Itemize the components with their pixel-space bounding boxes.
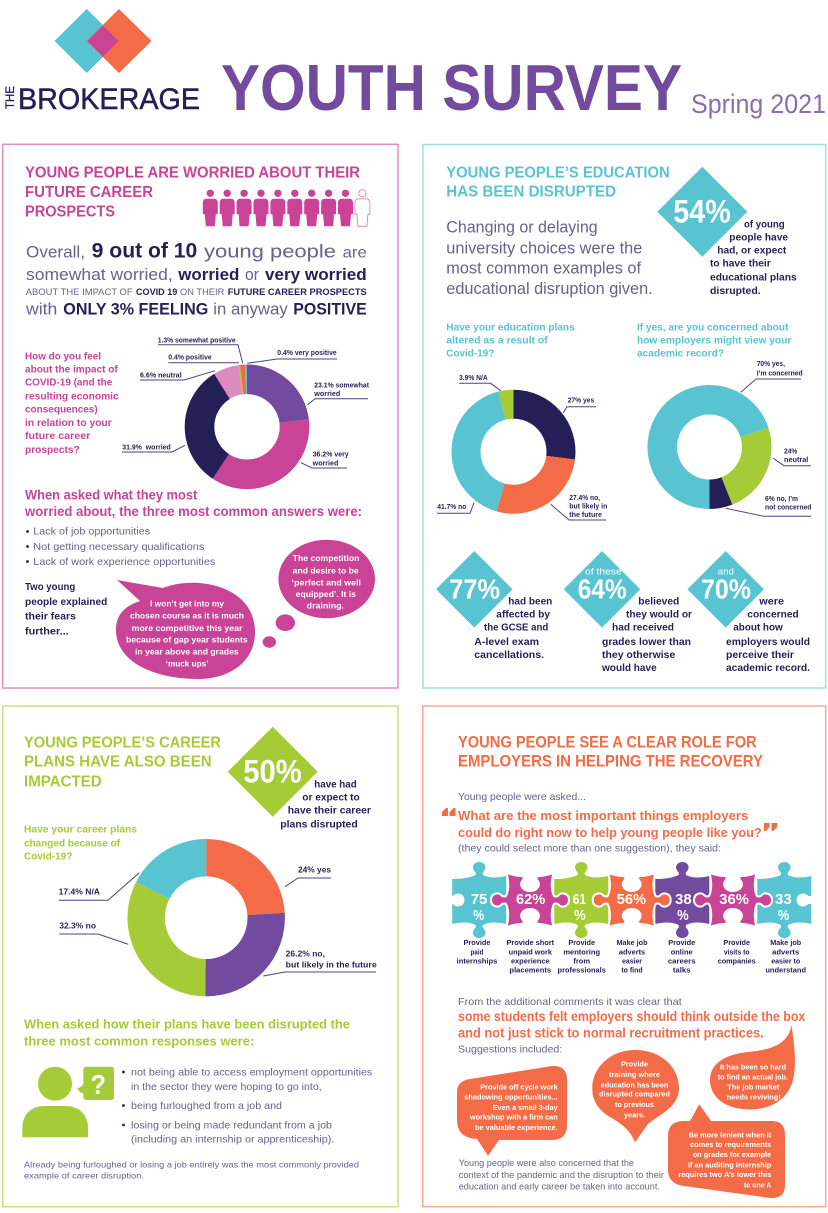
heading: IMPACTED xyxy=(24,773,102,790)
chart labels: education plans: 41.7% no xyxy=(437,504,466,511)
speech bubble: lenient on grades: to one A xyxy=(744,1180,772,1189)
puzzle labels: understand xyxy=(765,965,806,974)
footnote: Already being furloughed or losing a job entirely was the most commonly provided xyxy=(24,1160,359,1170)
stat: 70%: employers would xyxy=(726,636,810,648)
speech bubble: work shadowing: shadowing opportunities... xyxy=(464,1093,558,1102)
stat: 77%: had been xyxy=(508,595,552,607)
speech bubble: work shadowing: Even a small 3-day xyxy=(493,1103,558,1112)
headline statement: worried xyxy=(177,266,239,284)
stat: 64%: of these xyxy=(585,567,622,577)
thought bubble: perfect and well equipped: ‘perfect and well xyxy=(292,577,361,587)
puzzle labels xyxy=(457,938,806,974)
chart labels: career plans: but likely in the future xyxy=(286,959,377,969)
puzzle labels: Provide short xyxy=(506,938,555,947)
stat text: 50%: have their career xyxy=(288,805,371,817)
speech bubble: job market xyxy=(710,1025,795,1110)
chart labels: career plans: 32.3% no xyxy=(59,921,96,931)
chart labels: worried xyxy=(312,461,338,468)
stat: 64%: grades lower than xyxy=(602,636,691,648)
bullet list: worries: Lack of job opportunities xyxy=(33,526,150,538)
chart labels: 23.1% somewhat xyxy=(314,383,370,390)
puzzle graphic: employer suggestions: 38 xyxy=(675,891,692,908)
headline statement: COVID 19 xyxy=(136,287,177,298)
panel: career plans xyxy=(3,706,398,1207)
chart labels: academic record: 24% xyxy=(784,448,798,455)
body text: most common examples of xyxy=(446,260,641,278)
speech bubble: course competition: because of gap year students xyxy=(126,635,248,645)
headline statement: FUTURE CAREER PROSPECTS xyxy=(228,287,367,298)
puzzle labels: online xyxy=(671,947,693,956)
chart labels: worried xyxy=(313,391,340,398)
speech bubble: lenient on grades: if an auditing internship xyxy=(688,1160,772,1169)
question: education plans altered: altered as a result of xyxy=(446,334,548,346)
chart labels: academic record: not concerned xyxy=(765,504,811,511)
speech bubble: lenient on grades: requires two A’s lower this xyxy=(678,1170,771,1179)
icon: nine of ten people xyxy=(203,190,370,226)
chart labels: career plans: 17.4% N/A xyxy=(59,886,100,896)
headline statement: with xyxy=(25,299,57,318)
stat: 64%: 64% xyxy=(578,573,627,604)
logo: The Brokerage: BROKERAGE xyxy=(18,83,200,116)
chart labels: 31.9% worried xyxy=(122,444,171,451)
chart labels: career plans: 26.2% no, xyxy=(286,948,325,958)
thought bubble: perfect and well equipped: draining. xyxy=(307,601,344,611)
question: academic record xyxy=(637,321,791,360)
heading xyxy=(458,734,763,770)
heading: YOUNG PEOPLE ARE WORRIED ABOUT THEIR xyxy=(25,165,360,182)
stat: 70%: perceive their xyxy=(726,649,794,661)
stat text: 54%: to have their xyxy=(710,258,771,270)
stat text: 50%: or expect to xyxy=(302,792,360,804)
heading: PROSPECTS xyxy=(25,204,115,221)
puzzle graphic: employer suggestions: 36% xyxy=(719,891,749,908)
panel: employers role xyxy=(423,706,826,1207)
bullet list: disruptions: being furloughed from a job and xyxy=(131,1100,282,1112)
heading: HAS BEEN DISRUPTED xyxy=(446,184,616,201)
heading: FUTURE CAREER xyxy=(25,184,153,201)
speech bubble: course competition: ‘muck ups’ xyxy=(166,659,208,669)
question text xyxy=(25,350,119,456)
stat: 77%: cancellations. xyxy=(474,649,544,661)
chart labels: academic record: 6% no, I’m xyxy=(765,496,798,503)
stat: 77%: 77% xyxy=(449,573,500,604)
speech bubble: work shadowing xyxy=(457,1066,567,1156)
stat text: 54%: people have xyxy=(729,232,788,244)
question: career plans changed: Covid-19? xyxy=(24,851,72,863)
stat diamond: 54% xyxy=(657,167,747,257)
chart labels xyxy=(122,338,370,468)
chart labels: education plans: 27% yes xyxy=(568,398,594,405)
stat: 77%: affected by xyxy=(496,609,550,621)
stat: 64% xyxy=(564,551,692,674)
chart labels: education plans: the future xyxy=(569,512,602,519)
quote question xyxy=(458,808,762,840)
footnote xyxy=(24,1160,359,1181)
puzzle labels: adverts xyxy=(772,947,799,956)
puzzle graphic: employer suggestions: 56% xyxy=(617,891,646,908)
heading xyxy=(25,165,360,221)
additional comments text: and not just stick to normal recruitment practices. xyxy=(458,1026,764,1041)
subheading: disruption responses: When asked how their plans have been disrupted the xyxy=(24,1016,350,1031)
stat: 64%: had received xyxy=(612,622,674,634)
puzzle labels: internships xyxy=(457,957,497,966)
chart labels: career plans: 24% yes xyxy=(298,865,331,875)
puzzle labels: talks xyxy=(673,965,691,974)
icon: person with question xyxy=(22,1067,114,1137)
heading xyxy=(446,165,670,201)
heading: YOUNG PEOPLE SEE A CLEAR ROLE FOR xyxy=(458,734,757,752)
question text: future career xyxy=(25,430,90,442)
stat: 70%: were xyxy=(758,595,784,607)
additional comments text: From the additional comments it was clear that xyxy=(458,996,682,1008)
stat text: 54%: of young xyxy=(744,219,785,231)
stat: 70%: about how xyxy=(733,622,783,634)
question: career plans changed: Have your career plans xyxy=(24,823,137,835)
puzzle graphic: employer suggestions: % xyxy=(574,907,586,924)
speech bubble: training: disrupted compared xyxy=(599,1090,670,1099)
stat: 70%: concerned xyxy=(747,609,799,621)
stat text: 50%: plans disrupted xyxy=(280,819,358,831)
question: education plans altered xyxy=(446,321,575,360)
speech bubble: lenient on grades xyxy=(668,1104,785,1198)
stat text: 50%: have had xyxy=(314,779,357,791)
headline statement: young people xyxy=(204,242,336,262)
bullet list: disruptions: losing or being made redundant from a job xyxy=(131,1120,332,1132)
headline statement: are xyxy=(343,245,367,262)
puzzle labels: easier xyxy=(622,957,642,966)
stat text: 54%: disrupted. xyxy=(710,285,761,297)
stat: 77%: A-level exam xyxy=(474,636,539,648)
heading: EMPLOYERS IN HELPING THE RECOVERY xyxy=(458,752,763,770)
headline statement: very worried xyxy=(265,266,367,284)
chart labels: education plans: 27.4% no, xyxy=(569,495,600,502)
headline statement xyxy=(25,240,367,318)
question: education plans altered: Covid-19? xyxy=(446,348,494,360)
heading: YOUNG PEOPLE’S CAREER xyxy=(24,735,221,752)
puzzle labels: professionals xyxy=(558,965,606,974)
speech bubble: work shadowing: be valuable experience. xyxy=(475,1123,558,1132)
speech bubble: lenient on grades: on grades for example xyxy=(693,1150,771,1159)
puzzle labels: paid xyxy=(471,947,484,956)
icon: person with question: ? xyxy=(90,1069,106,1100)
thought bubble: perfect and well equipped: The competition xyxy=(293,553,359,563)
stat: 70%: academic record. xyxy=(726,662,810,674)
text: two young people: people explained xyxy=(25,596,107,608)
puzzle labels: experience xyxy=(511,957,550,966)
body text: university choices were the xyxy=(446,239,642,257)
quote question: could do right now to help young people like you? xyxy=(458,825,762,840)
additional comments text xyxy=(458,996,806,1056)
puzzle graphic: employer suggestions: % xyxy=(473,907,484,924)
stat: 77%: the GCSE and xyxy=(484,622,548,634)
puzzle graphic: employer suggestions: % xyxy=(677,907,689,924)
intro text: Young people were asked... xyxy=(458,791,586,803)
donut chart: feelings about COVID impact xyxy=(185,364,309,489)
question: career plans changed xyxy=(24,823,137,863)
speech bubble: job market: to find an actual job. xyxy=(718,1073,788,1082)
stat diamond: 54%: 54% xyxy=(673,193,731,229)
puzzle labels: unpaid work xyxy=(509,947,553,956)
bullet list: disruptions: not being able to access employment opportunities xyxy=(131,1066,372,1078)
donut chart: career plans xyxy=(128,839,285,996)
closing text xyxy=(459,1158,664,1193)
additional comments text: some students felt employers should think outside the box xyxy=(458,1009,806,1024)
puzzle graphic: employer suggestions: 61 xyxy=(573,891,586,908)
additional comments text: Suggestions included: xyxy=(458,1044,562,1056)
subheading: disruption responses xyxy=(24,1016,350,1048)
text: two young people: further... xyxy=(25,626,69,638)
question: academic record: how employers might view your xyxy=(637,334,791,346)
stat text: 54%: had, or expect xyxy=(717,245,787,257)
bullet list: worries xyxy=(26,526,215,568)
speech bubble: course competition: in year above and grades xyxy=(135,647,239,657)
question text: consequences) xyxy=(25,404,98,416)
headline statement: somewhat worried, xyxy=(26,266,173,284)
speech bubble: training: Provide xyxy=(621,1060,648,1069)
donut chart: academic record concern xyxy=(648,385,772,509)
question text: resulting economic xyxy=(25,390,119,402)
puzzle labels: to find xyxy=(621,965,643,974)
thought bubble: perfect and well equipped xyxy=(263,540,375,648)
chart labels: education plans xyxy=(437,375,607,520)
puzzle graphic: employer suggestions: 75 xyxy=(471,891,487,908)
note text: (they could select more than one suggestion), they said: xyxy=(458,842,721,854)
footnote: example of career disruption. xyxy=(24,1171,144,1181)
chart labels: 0.4% positive xyxy=(168,355,212,362)
puzzle labels: Provide xyxy=(668,938,695,947)
closing text: education and early career be taken into account. xyxy=(459,1182,660,1193)
headline statement: ONLY 3% FEELING xyxy=(63,299,208,318)
stat: 64%: they would or xyxy=(626,609,692,621)
speech bubble: training: education has been xyxy=(601,1080,669,1089)
puzzle labels: Provide xyxy=(568,938,595,947)
chart labels: 6.6% neutral xyxy=(140,372,182,379)
puzzle labels: from xyxy=(573,957,590,966)
quote question: What are the most important things employers xyxy=(458,808,748,823)
question text: prospects? xyxy=(25,444,80,456)
puzzle labels: easier to xyxy=(771,957,801,966)
question text: COVID-19 (and the xyxy=(25,377,112,389)
body text xyxy=(446,219,653,298)
bullet list: worries: Not getting necessary qualifications xyxy=(33,541,204,553)
bullet list: disruptions: (including an internship or apprenticeship). xyxy=(131,1134,334,1146)
stat text: 54% xyxy=(710,219,797,297)
stat: 64%: would have xyxy=(601,662,657,674)
puzzle labels: Make job xyxy=(616,938,648,947)
question: education plans altered: Have your education plans xyxy=(446,321,575,333)
speech bubble: job market: needs reviving! xyxy=(727,1093,781,1102)
text: two young people xyxy=(25,581,107,638)
puzzle labels: Provide xyxy=(723,938,750,947)
speech bubble: training: years. xyxy=(624,1110,645,1119)
panel: education disruption xyxy=(423,144,826,688)
speech bubble: course competition: I won’t get into my xyxy=(150,599,224,609)
chart labels: career plans xyxy=(59,865,377,976)
stat: 70% xyxy=(687,551,810,674)
question text: How do you feel xyxy=(25,350,101,362)
puzzle labels: Make job xyxy=(770,938,802,947)
puzzle labels: placements xyxy=(509,965,551,974)
chart labels: 36.2% very xyxy=(313,452,349,459)
puzzle labels: visits to xyxy=(724,947,750,956)
chart labels: academic record: neutral xyxy=(784,457,808,464)
puzzle graphic: employer suggestions: % xyxy=(778,907,789,924)
headline statement: POSITIVE xyxy=(293,299,367,318)
subheading: worries: worried about, the three most common answers were: xyxy=(24,504,362,519)
donut chart: education plans altered xyxy=(452,390,575,514)
heading: YOUNG PEOPLE’S EDUCATION xyxy=(446,165,670,182)
heading: PLANS HAVE ALSO BEEN xyxy=(24,754,212,771)
chart labels: academic record xyxy=(726,361,811,516)
subheading: disruption responses: three most common responses were: xyxy=(24,1033,254,1048)
chart labels: 1.3% somewhat positive xyxy=(158,338,236,345)
subheading: worries xyxy=(24,487,362,519)
headline statement: ON THEIR xyxy=(180,287,224,298)
logo: The Brokerage: THE xyxy=(3,86,17,109)
speech bubble: job market: The job market xyxy=(727,1083,780,1092)
icon: opening quote marks xyxy=(442,808,456,816)
speech bubble: work shadowing: Provide off cycle work xyxy=(480,1082,558,1091)
title: YOUTH SURVEY xyxy=(221,51,682,124)
headline statement: or xyxy=(245,266,259,284)
question text: about the impact of xyxy=(25,364,118,376)
panel: career prospects worries xyxy=(3,144,398,688)
bullet list: disruptions: in the sector they were hoping to go into, xyxy=(131,1081,322,1093)
text: two young people: their fears xyxy=(25,611,76,623)
chart labels: academic record: 70% yes, xyxy=(757,361,785,368)
stat text: 54%: educational plans xyxy=(710,272,797,284)
thought bubble: perfect and well equipped: and desire to be xyxy=(293,565,359,575)
question: career plans changed: changed because of xyxy=(24,837,120,849)
body text: educational disruption given. xyxy=(446,280,653,298)
speech bubble: work shadowing: workshop with a firm can xyxy=(469,1113,558,1122)
speech bubble: course competition: chosen course as it is much xyxy=(130,611,244,621)
speech bubble: lenient on grades: comes to requirements xyxy=(690,1140,771,1149)
chart labels: 0.4% very positive xyxy=(277,350,337,357)
stat text: 50% xyxy=(280,779,371,831)
puzzle labels: Provide xyxy=(464,938,490,947)
speech bubble: course competition xyxy=(116,580,255,679)
headline statement: 9 out of 10 xyxy=(92,240,197,263)
puzzle graphic: employer suggestions: 33 xyxy=(775,891,792,908)
logo: The Brokerage xyxy=(3,9,200,116)
puzzle labels: adverts xyxy=(619,947,645,956)
puzzle graphic: employer suggestions: 62% xyxy=(516,891,545,908)
chart labels: education plans: but likely in xyxy=(569,504,607,511)
speech bubble: training: to previous xyxy=(615,1100,654,1109)
headline statement: Overall, xyxy=(26,243,85,262)
closing text: context of the pandemic and the disruption to their xyxy=(459,1170,664,1181)
chart labels: education plans: 3.9% N/A xyxy=(459,375,488,382)
speech bubble: course competition: more competitive this year xyxy=(132,623,243,633)
stat: 64%: believed xyxy=(638,595,679,607)
stat: 77% xyxy=(436,551,552,661)
puzzle graphic: employer suggestions xyxy=(450,862,813,938)
headline statement: ABOUT THE IMPACT OF xyxy=(26,287,133,298)
puzzle labels: companies xyxy=(718,957,756,966)
stat: 70%: and xyxy=(718,567,734,577)
closing text: Young people were also concerned that the xyxy=(459,1158,634,1169)
puzzle labels: careers xyxy=(668,957,696,966)
speech bubble: training: training where xyxy=(609,1070,660,1079)
heading xyxy=(24,735,221,790)
question: academic record: If yes, are you concerned about xyxy=(637,321,789,333)
speech bubble: lenient on grades: Be more lenient when it xyxy=(689,1130,772,1139)
stat diamond: 50%: 50% xyxy=(243,754,302,790)
body text: Changing or delaying xyxy=(446,219,598,237)
bullet list: worries: Lack of work experience opportunities xyxy=(33,556,215,568)
question text: in relation to your xyxy=(25,417,112,429)
icon: closing quote marks xyxy=(764,823,777,831)
puzzle labels: mentoring xyxy=(563,947,600,956)
speech bubble: job market: It has been so hard xyxy=(720,1063,786,1072)
stat diamond: 50% xyxy=(228,727,318,817)
subheading: worries: When asked what they most xyxy=(25,487,198,502)
stat: 70%: 70% xyxy=(701,573,751,604)
text: two young people: Two young xyxy=(25,581,75,593)
speech bubble: training xyxy=(592,1050,679,1142)
chart labels: academic record: I’m concerned xyxy=(757,371,803,378)
stat: 64%: they otherwise xyxy=(602,649,675,661)
bullet list: disruptions xyxy=(122,1066,372,1146)
headline statement: in anyway xyxy=(213,299,288,318)
thought bubble: perfect and well equipped: equipped’. It is xyxy=(296,589,356,599)
question: academic record: academic record? xyxy=(637,348,724,360)
